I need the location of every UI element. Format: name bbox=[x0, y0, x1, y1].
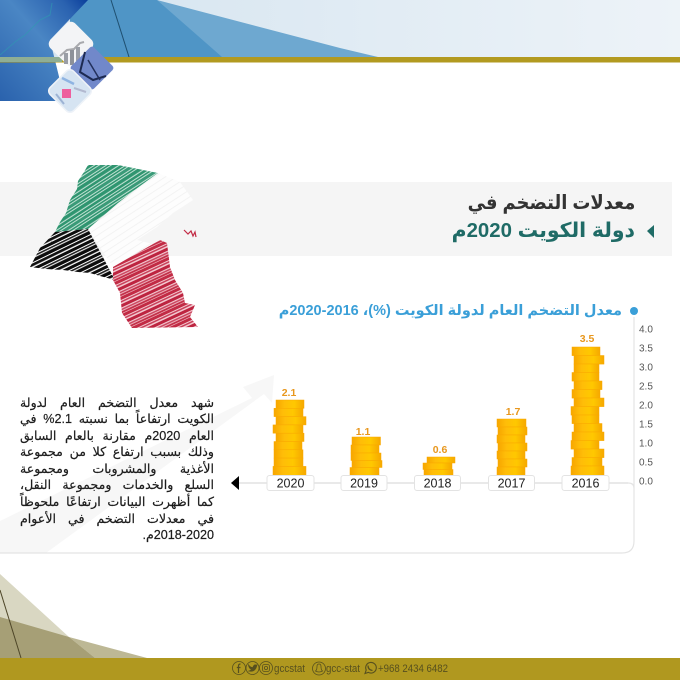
footer handle gcc-stat: gcc-stat bbox=[326, 663, 360, 675]
year pill 2019: 2019 bbox=[350, 476, 378, 490]
icon: whatsapp bbox=[365, 662, 376, 674]
body paragraph: السلع والخدمات ومجموعة النقل، bbox=[20, 478, 214, 492]
x axis line bbox=[238, 482, 628, 484]
body paragraph: العام 2020م مقارنة بالعام السابق bbox=[20, 429, 214, 443]
map: red area bbox=[113, 240, 198, 328]
y axis labels: 1.5 bbox=[639, 420, 653, 430]
year pill 2016: 2016 bbox=[572, 476, 599, 490]
diamond: chart bbox=[46, 19, 96, 69]
year pill 2019 bbox=[341, 476, 387, 490]
title line 2: دولة الكويت 2020م bbox=[452, 220, 635, 242]
year pill 2016 bbox=[562, 476, 609, 490]
coin stack 2020 bbox=[273, 400, 306, 475]
chart title bullet bbox=[630, 307, 638, 315]
year pill 2018: 2018 bbox=[424, 476, 451, 490]
year pill 2020: 2020 bbox=[277, 476, 304, 490]
coin stack 2016 bbox=[571, 347, 604, 476]
body paragraph: شهد معدل التضخم العام لدولة bbox=[20, 396, 214, 410]
title band bbox=[0, 182, 672, 256]
y axis labels bbox=[639, 324, 653, 488]
map: green area bbox=[55, 165, 158, 232]
map of Kuwait in flag colours bbox=[30, 165, 198, 328]
title arrow marker bbox=[647, 225, 654, 238]
icon: snapchat bbox=[312, 662, 326, 675]
background arrow bbox=[0, 375, 274, 553]
footer bar bbox=[0, 658, 680, 680]
y axis labels: 4.0 bbox=[639, 324, 653, 336]
left bar fade bbox=[0, 57, 62, 62]
coin stack 2017 bbox=[497, 419, 527, 476]
card outline and axes bbox=[0, 317, 634, 553]
footer decoration bbox=[0, 574, 147, 658]
body paragraph: وذلك بسبب ارتفاع كلا من مجموعة bbox=[20, 445, 214, 459]
header banner bbox=[0, 0, 680, 101]
icon: instagram bbox=[260, 662, 272, 674]
x axis arrow bbox=[231, 476, 239, 490]
body paragraph: في معدلات التضخم في الأعوام bbox=[20, 512, 214, 526]
year pill 2020 bbox=[267, 476, 314, 490]
map: black area bbox=[30, 229, 115, 280]
value labels: 1.1 bbox=[356, 426, 370, 438]
y axis labels: 3.5 bbox=[639, 344, 653, 354]
map: red island bbox=[184, 230, 196, 237]
value labels bbox=[282, 333, 594, 456]
y axis labels: 0.5 bbox=[639, 458, 653, 468]
value labels: 0.6 bbox=[433, 444, 447, 456]
icon: twitter bbox=[246, 662, 259, 674]
body paragraph: 2018-2020م. bbox=[142, 528, 214, 542]
value labels: 1.7 bbox=[506, 406, 520, 418]
footer contacts bbox=[232, 662, 376, 675]
coin stack 2019 bbox=[350, 437, 382, 476]
y axis labels: 3.0 bbox=[639, 362, 653, 374]
value labels: 2.1 bbox=[282, 387, 296, 399]
title line 1: معدلات التضخم في bbox=[467, 192, 635, 214]
y axis labels: 2.0 bbox=[639, 400, 653, 412]
y axis labels: 0.0 bbox=[639, 476, 653, 488]
icon: facebook bbox=[232, 662, 246, 674]
body paragraph bbox=[20, 396, 214, 542]
y axis labels: 2.5 bbox=[639, 382, 653, 392]
body paragraph: كما أظهرت البيانات ارتفاعًا ملحوظاً bbox=[20, 495, 214, 509]
body paragraph: الكويت ارتفاعاً بما نسبته 2.1% في bbox=[20, 412, 214, 426]
diamond: documents bbox=[47, 68, 93, 114]
gold header bar bbox=[0, 57, 680, 62]
value labels: 3.5 bbox=[580, 333, 594, 345]
y axis labels: 1.0 bbox=[639, 438, 653, 450]
year pill 2017: 2017 bbox=[498, 476, 525, 490]
footer handle gccstat: gccstat bbox=[274, 663, 305, 675]
year pill 2017 bbox=[488, 476, 534, 490]
footer phone: +968 2434 6482 bbox=[378, 663, 448, 675]
body paragraph: الأغذية والمشروبات ومجموعة bbox=[20, 462, 214, 476]
header diamonds bbox=[46, 19, 115, 114]
coin stack 2018 bbox=[423, 457, 455, 476]
diamond: photo bbox=[69, 45, 115, 91]
year pill 2018 bbox=[414, 476, 460, 490]
chart title: معدل التضخم العام لدولة الكويت (%)، 2016-2020م bbox=[279, 303, 622, 319]
map: white area bbox=[88, 173, 193, 267]
